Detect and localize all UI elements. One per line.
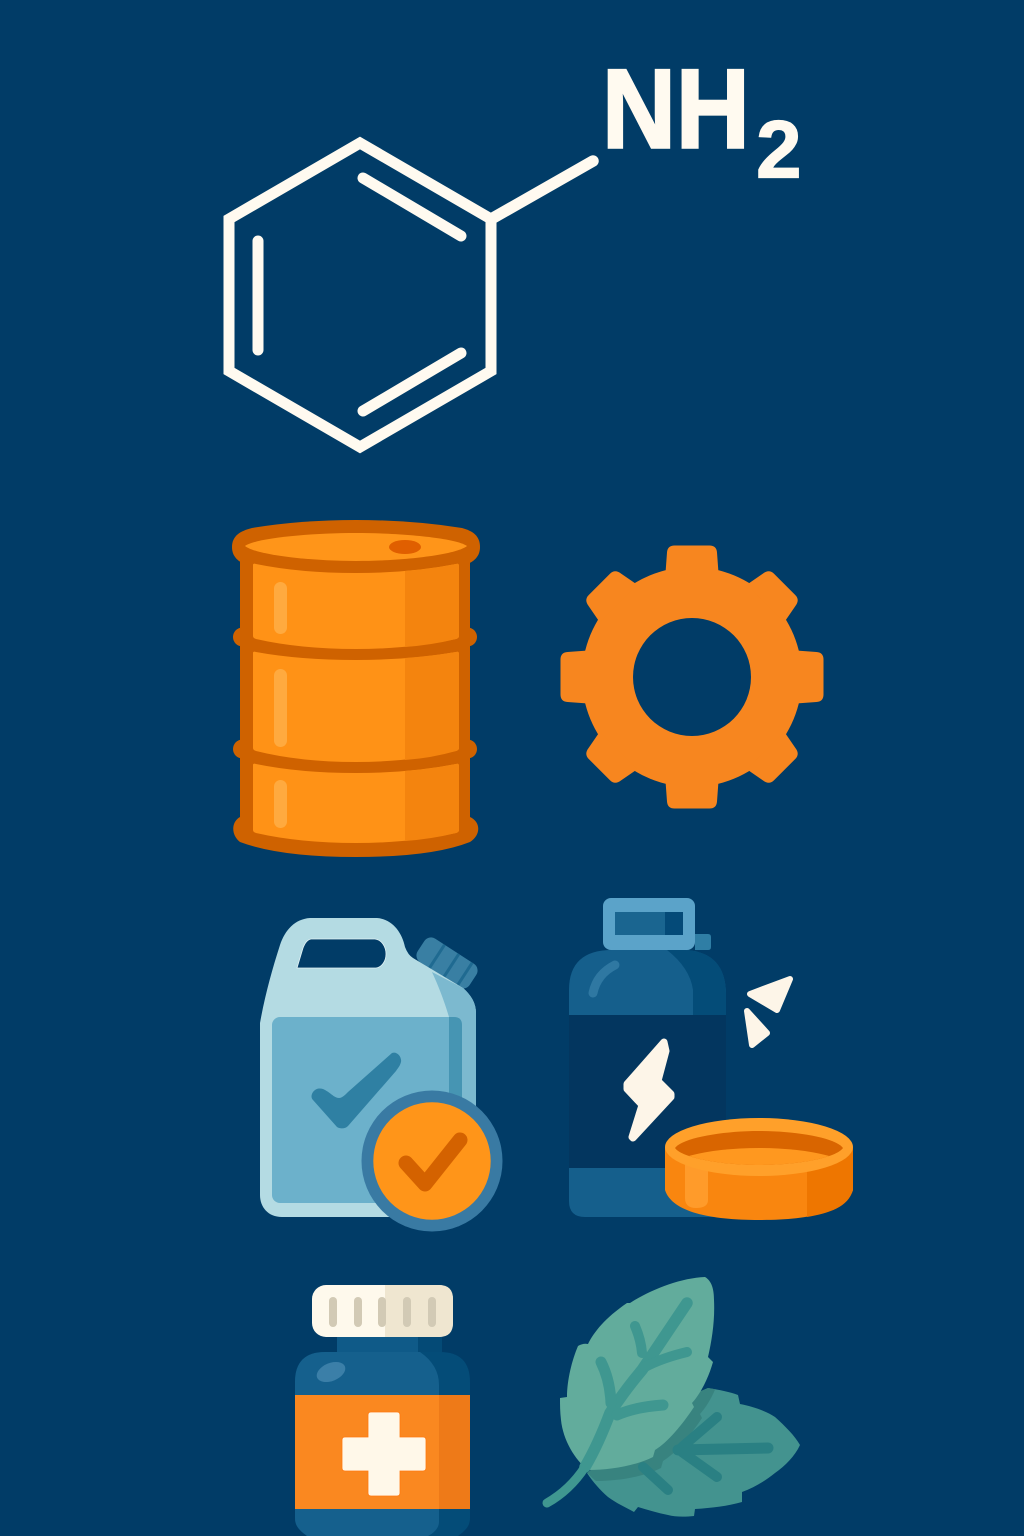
lightning bolt [627,1042,671,1138]
label: NH: NH [602,46,750,172]
cap ridges [329,1297,436,1327]
icon: gear [560,546,824,808]
icon: battery bottle with lid [569,898,855,1220]
benzene ring [229,143,491,447]
front leaf [560,1277,714,1470]
lid rim [665,1118,853,1176]
bottle highlight [314,1358,348,1386]
bottle neck [337,1337,418,1352]
jug check mark [312,1053,401,1128]
spark shards [747,979,790,1045]
back leaf veins [643,1417,768,1490]
middle panel [253,652,459,762]
orange label [295,1395,470,1509]
lid side shade [807,1147,853,1217]
amine bond [493,161,593,218]
icon: leaves [547,1277,800,1517]
barrel rib bumps [233,628,477,758]
medical cross [342,1412,426,1496]
molecule: aniline structure [229,46,802,447]
icon: jerrycan with check [260,918,502,1232]
bottle body [295,1352,470,1536]
badge disc [373,1102,491,1220]
jug label [272,1017,462,1203]
bottle base [569,1168,726,1217]
bottle cap [312,1285,453,1337]
cap shade [385,1285,453,1337]
lid side [665,1147,853,1220]
barrel shell [233,555,478,857]
lid side highlight [685,1165,708,1208]
collar tab [695,934,711,950]
infographic canvas [224,68,853,1536]
jug body [260,918,476,1217]
back leaf [587,1388,800,1517]
jug cap [413,934,481,992]
collar window [615,912,683,935]
bottle shoulder [569,950,726,1015]
upper panel [253,564,459,649]
leaf stem tail [547,1467,585,1503]
bottle body lit side [295,1352,439,1536]
bung [389,540,421,554]
bottle highlight [593,965,615,993]
badge check [406,1140,460,1184]
badge ring [362,1090,502,1232]
icon: oil barrel [232,520,480,857]
lid recess [675,1131,843,1165]
back leaf shadow [588,1388,715,1481]
barrel top rim [232,520,480,573]
barrel lid [245,533,467,561]
jug handle opening [297,939,386,968]
bottle shoulder shade [667,950,726,1015]
front leaf veins [585,1303,687,1467]
label shade [439,1395,470,1509]
bottle label [569,1015,726,1168]
icon: medicine bottle [295,1285,470,1536]
lower panel [253,764,459,843]
jug shaded side [432,972,476,1120]
bottle collar [603,898,695,950]
barrel highlights [274,582,287,828]
label: subscript 2: 2 [756,104,802,196]
lid floor [689,1148,828,1165]
jug label shaded strip [449,1017,462,1110]
